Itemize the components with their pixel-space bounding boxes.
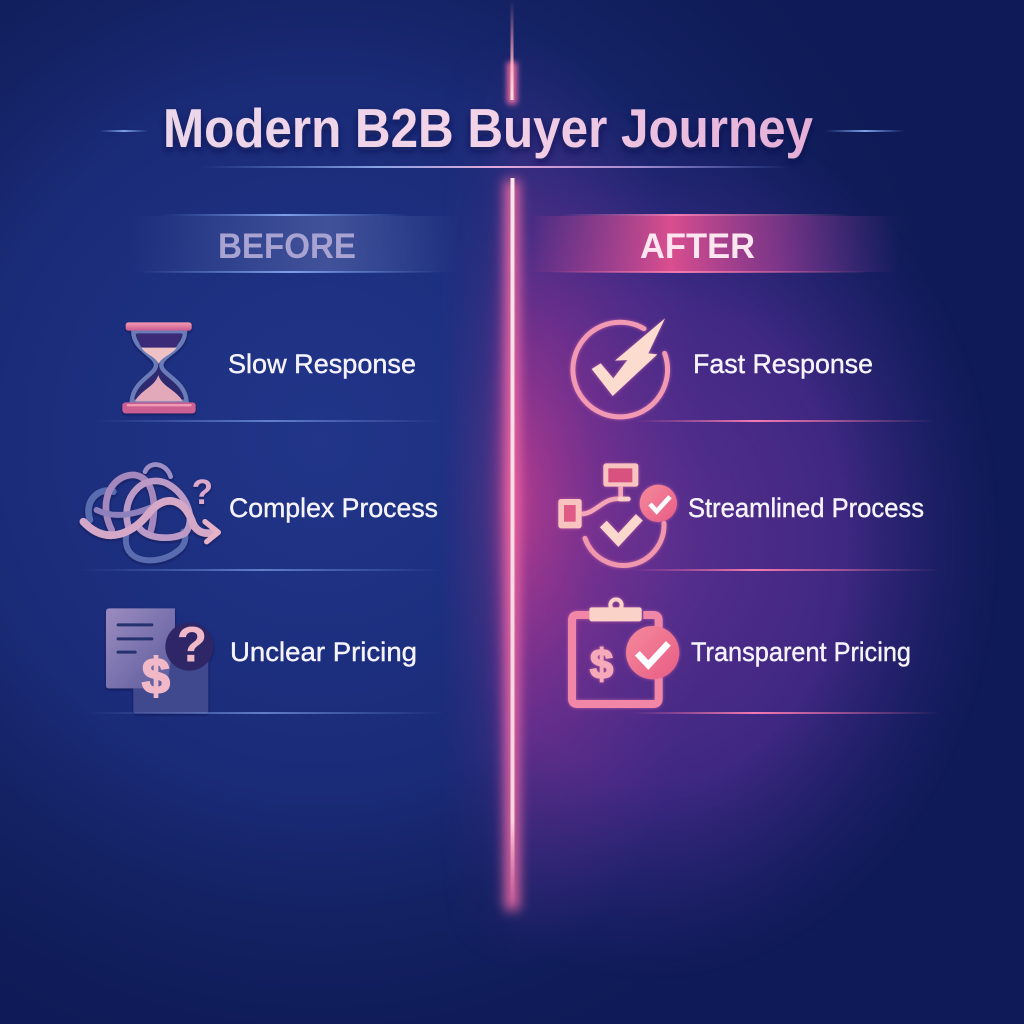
icon: transparent pricing clipboard: $ <box>590 640 613 687</box>
icon: hourglass <box>122 322 196 413</box>
label: slow response: Slow Response <box>228 349 416 379</box>
label: fast response: Fast Response <box>693 349 873 379</box>
label: complex process: Complex Process <box>229 493 438 523</box>
divider row 1 <box>95 420 445 422</box>
panel: after header: AFTER <box>640 227 755 266</box>
icon: fast response check and bolt <box>573 318 668 417</box>
icon: transparent pricing clipboard <box>572 599 679 704</box>
icon: tangled process <box>83 465 218 560</box>
divider row 1 <box>635 420 935 422</box>
divider row 2 <box>80 569 445 571</box>
panel: after list <box>558 318 940 714</box>
panel: before list <box>80 322 445 714</box>
label: transparent pricing: Transparent Pricing <box>691 637 911 667</box>
label: unclear pricing: Unclear Pricing <box>230 637 417 667</box>
icon: streamlined process <box>558 463 677 565</box>
icon: tangled process: ? <box>192 473 213 512</box>
divider row 2 <box>630 569 940 571</box>
label: streamlined process: Streamlined Process <box>688 493 924 523</box>
divider row 3 <box>85 712 445 714</box>
panel: after header <box>530 214 900 273</box>
divider row 3 <box>630 712 940 714</box>
panel: before header: BEFORE <box>218 227 356 266</box>
icon: unclear pricing document: $ <box>142 648 170 704</box>
icon: unclear pricing document <box>106 608 213 713</box>
panel: before header <box>130 214 460 273</box>
center divider glowing line <box>505 0 519 910</box>
icon: unclear pricing document: ? <box>177 617 207 673</box>
title: Modern B2B Buyer Journey <box>163 97 813 159</box>
